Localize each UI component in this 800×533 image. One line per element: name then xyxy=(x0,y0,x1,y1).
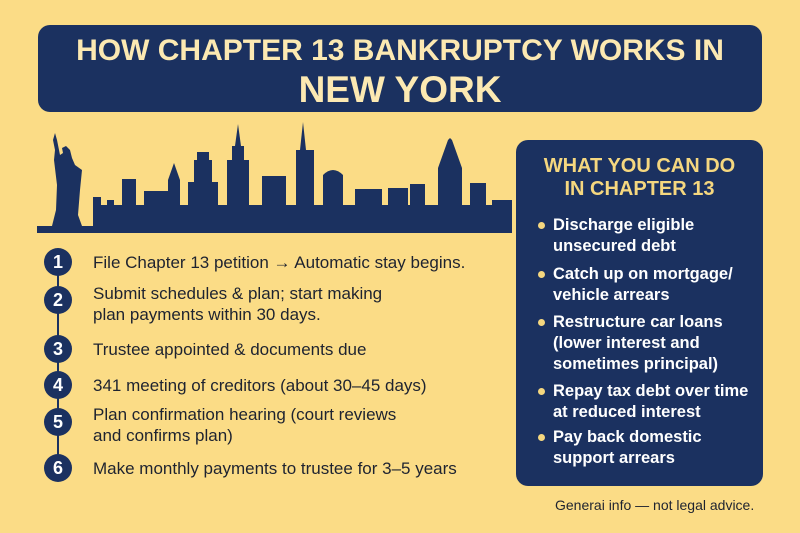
bullet 3: Restructure car loans (lower interest and sometimes principal) xyxy=(553,313,723,373)
title xyxy=(38,25,762,112)
step 6: Make monthly payments to trustee for 3–5 years xyxy=(93,459,457,478)
step 6 xyxy=(44,454,457,482)
step 1: 1 xyxy=(53,252,63,272)
step 1 xyxy=(44,248,465,276)
title: HOW CHAPTER 13 BANKRUPTCY WORKS IN xyxy=(76,34,724,67)
step 6: 6 xyxy=(53,458,63,478)
step 5: and confirms plan) xyxy=(93,426,233,445)
panel heading xyxy=(544,155,735,200)
step 2: Submit schedules & plan; start making xyxy=(93,284,382,303)
bullet 4: Repay tax debt over time at reduced interest xyxy=(553,382,748,421)
step 1: File Chapter 13 petition → Automatic stay begins. xyxy=(93,253,465,272)
step 2: plan payments within 30 days. xyxy=(93,305,321,324)
timeline line xyxy=(57,262,59,468)
panel heading: IN CHAPTER 13 xyxy=(564,178,715,200)
step 3: Trustee appointed & documents due xyxy=(93,340,366,359)
panel: what you can do xyxy=(516,140,763,486)
bullet 2: Catch up on mortgage/ vehicle arrears xyxy=(553,265,733,304)
step 4: 341 meeting of creditors (about 30–45 days) xyxy=(93,376,427,395)
bullet 1: Discharge eligible unsecured debt xyxy=(553,216,694,255)
step 2: 2 xyxy=(53,290,63,310)
title: NEW YORK xyxy=(299,69,501,110)
step 4 xyxy=(44,371,427,399)
footer note: Generai info — not legal advice. xyxy=(555,497,754,513)
step 3: 3 xyxy=(53,339,63,359)
step 5 xyxy=(44,405,396,445)
skyline xyxy=(37,122,512,233)
step 5: 5 xyxy=(53,412,63,432)
step 5: Plan confirmation hearing (court reviews xyxy=(93,405,396,424)
bullet 5: Pay back domestic support arrears xyxy=(553,428,702,467)
step 3 xyxy=(44,335,366,363)
step 2 xyxy=(44,284,382,324)
panel heading: WHAT YOU CAN DO xyxy=(544,155,735,177)
step 4: 4 xyxy=(53,375,63,395)
